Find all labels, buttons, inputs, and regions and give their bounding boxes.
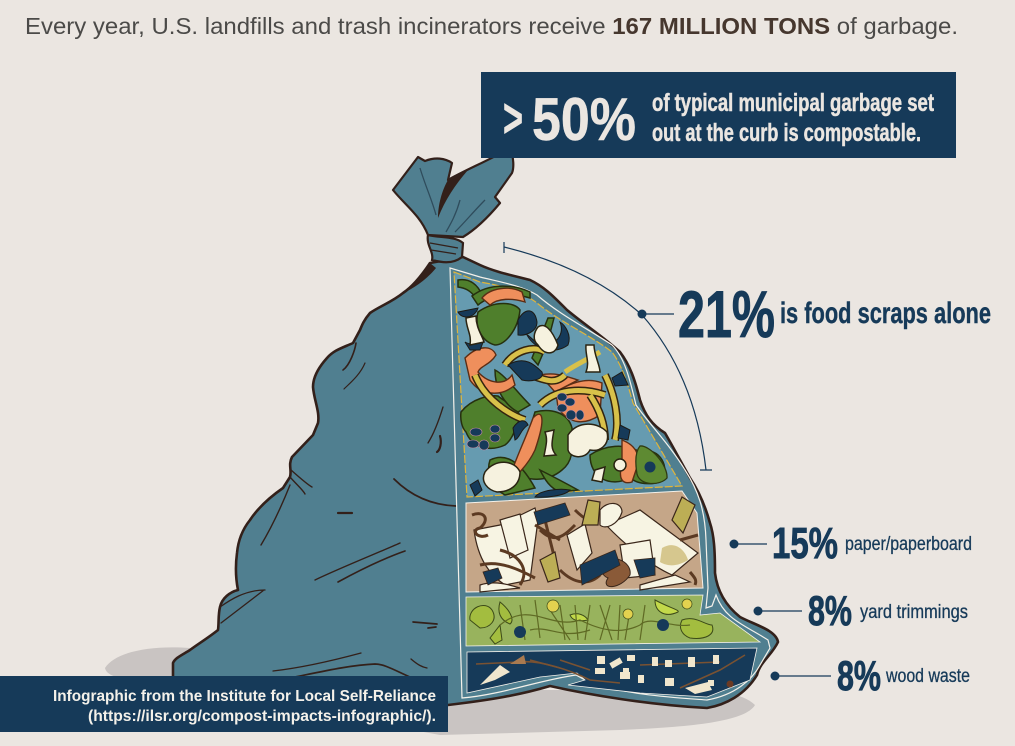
stat: 21 percent food scraps xyxy=(638,277,991,351)
title: Every year, U.S. landfills and trash incinerators receive 167 MILLION TONS of garbage. xyxy=(25,13,958,39)
ground shadow xyxy=(105,647,755,735)
avocado pit xyxy=(644,462,656,472)
branches xyxy=(476,655,745,688)
yellow banana peels xyxy=(475,349,617,440)
white paper scraps xyxy=(474,503,698,592)
stat: 8 percent wood xyxy=(770,652,970,699)
navy pieces xyxy=(458,308,630,497)
bag wrinkles xyxy=(220,343,456,678)
stat: 8 percent wood: wood waste xyxy=(885,666,970,687)
stat: 15 percent paper xyxy=(730,519,972,568)
panel: wood waste xyxy=(467,648,757,697)
brown scraps xyxy=(472,510,698,585)
credit box xyxy=(0,676,448,732)
olive cups xyxy=(540,497,695,582)
callout: over 50 percent: > xyxy=(503,86,523,149)
navy paper pieces xyxy=(483,503,655,585)
stat: 8 percent yard xyxy=(754,587,968,634)
panel: white stitch outline xyxy=(450,268,770,700)
callout: over 50 percent xyxy=(481,72,956,158)
yard background xyxy=(466,595,760,646)
greens xyxy=(458,280,665,495)
bag knot ears xyxy=(393,148,513,237)
brown crumple xyxy=(602,559,630,587)
panel: paper and paperboard xyxy=(466,491,703,592)
stat: 15 percent paper: paper/paperboard xyxy=(845,534,972,555)
credit box: Infographic from the Institute for Local Self-Reliance xyxy=(53,688,436,705)
stat: 8 percent yard: 8% xyxy=(808,587,852,634)
apple cores and cream pieces xyxy=(466,316,626,492)
ear shadow xyxy=(438,170,468,218)
ear creases xyxy=(420,168,485,232)
food background xyxy=(454,272,682,497)
panel: food scraps xyxy=(454,272,682,497)
leaves xyxy=(470,600,713,644)
knot xyxy=(428,235,463,262)
twigs xyxy=(500,600,690,640)
credit box: (https://ilsr.org/compost-impacts-infographic/). xyxy=(88,708,436,725)
bag neck shadow xyxy=(403,263,436,293)
callout: over 50 percent: out at the curb is compostable. xyxy=(652,119,921,147)
panel: yard trimmings xyxy=(466,595,760,646)
stat: 21 percent food scraps: 21% xyxy=(678,277,775,351)
avocado xyxy=(636,446,667,484)
flowers xyxy=(547,599,692,619)
garbage bag xyxy=(173,148,778,708)
blue grapes xyxy=(467,393,584,450)
blue buds xyxy=(514,619,669,638)
stat: 8 percent yard: yard trimmings xyxy=(860,602,968,623)
stat: 15 percent paper: 15% xyxy=(772,519,838,568)
brown chips xyxy=(510,655,734,688)
stat: 8 percent wood: 8% xyxy=(837,652,881,699)
wood chips xyxy=(480,655,719,694)
orange peels xyxy=(465,288,638,483)
stat: 21 percent bracket arc xyxy=(504,242,712,470)
wood background xyxy=(467,648,757,697)
tan stain xyxy=(660,545,688,565)
callout: over 50 percent: 50% xyxy=(532,86,636,153)
bag body xyxy=(173,257,778,708)
paper background xyxy=(466,491,703,592)
